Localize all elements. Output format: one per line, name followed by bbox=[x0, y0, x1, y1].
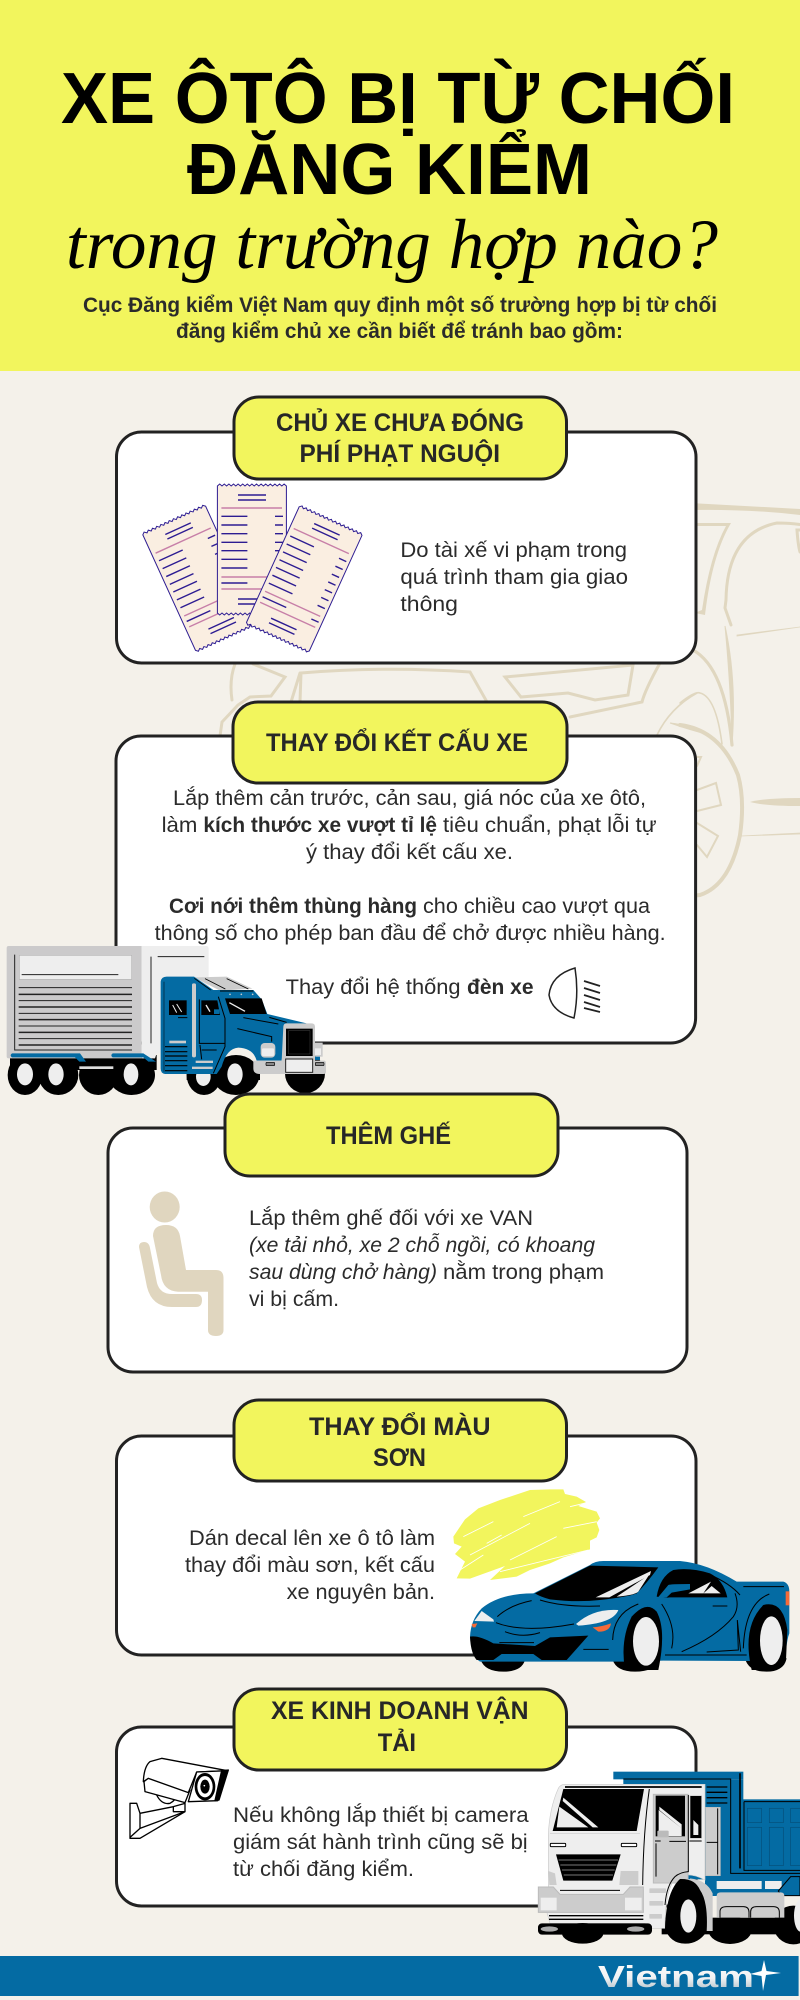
icon: headlight bbox=[549, 968, 600, 1018]
heading tab 3 bbox=[225, 1094, 558, 1176]
heading tab 5: XE KINH DOANH VẬN bbox=[271, 1695, 529, 1725]
text block 4: xe nguyên bản. bbox=[287, 1581, 435, 1604]
front wheel bbox=[690, 1878, 713, 1931]
box bbox=[7, 946, 142, 1058]
text block 5: giám sát hành trình cũng sẽ bị bbox=[233, 1831, 528, 1854]
text block 3 bbox=[249, 1207, 604, 1311]
text block 2 bbox=[155, 787, 666, 999]
icon: seated person bbox=[139, 1192, 224, 1336]
text block 4 bbox=[185, 1527, 435, 1604]
heading tab 1: PHÍ PHẠT NGUỘI bbox=[300, 438, 500, 468]
wheels bbox=[8, 1055, 42, 1095]
text block 1 bbox=[400, 539, 628, 616]
text block 5 bbox=[233, 1804, 529, 1881]
title line 1: XE ÔTÔ BỊ TỪ CHỐI bbox=[61, 57, 735, 139]
text block 2: cho chiều cao vượt qua bbox=[423, 895, 650, 918]
text block 3: vi bị cấm. bbox=[249, 1288, 339, 1311]
heading tab 1 bbox=[234, 397, 566, 479]
illustration: blue sports car bbox=[470, 1561, 789, 1672]
subtitle: đăng kiểm chủ xe cần biết để tránh bao gồm: bbox=[176, 319, 623, 343]
wheels and tyres bbox=[481, 1660, 525, 1672]
heading tab 5 bbox=[234, 1689, 566, 1770]
title line 2: ĐĂNG KIỂM bbox=[187, 129, 592, 210]
wheel arches bbox=[623, 1607, 662, 1670]
windshield bbox=[535, 1566, 658, 1601]
door bbox=[653, 1794, 688, 1883]
cab bbox=[538, 1784, 705, 1928]
panel: chủ xe chưa đóng phí phạt nguội bbox=[116, 397, 696, 663]
text block 5: từ chối đăng kiểm. bbox=[233, 1858, 414, 1881]
subtitle: Cục Đăng kiểm Việt Nam quy định một số trường hợp bị từ chối bbox=[83, 293, 717, 317]
body bbox=[470, 1561, 789, 1662]
text block 2: thông số cho phép ban đầu để chở được nhiều hàng. bbox=[155, 922, 666, 945]
logo bbox=[598, 1959, 781, 1994]
running gear bbox=[662, 1918, 800, 1934]
text block 4: thay đổi màu sơn, kết cấu bbox=[185, 1554, 435, 1577]
text block 1: quá trình tham gia giao bbox=[400, 566, 628, 589]
text block 2: ý thay đổi kết cấu xe. bbox=[306, 841, 513, 864]
illustration: blue container truck bbox=[7, 946, 326, 1095]
text block 5: Nếu không lắp thiết bị camera bbox=[233, 1804, 529, 1827]
icon: receipts bbox=[142, 484, 363, 653]
heading tab 4: THAY ĐỔI MÀU bbox=[309, 1411, 491, 1441]
text block 2: Thay đổi hệ thống bbox=[286, 976, 461, 999]
heading tab 5: TẢI bbox=[378, 1727, 416, 1757]
text block 2: làm bbox=[162, 814, 197, 837]
text block 1: thông bbox=[400, 593, 458, 616]
panel: thêm ghế bbox=[108, 1094, 687, 1372]
text block 2: kích thước xe vượt tỉ lệ bbox=[203, 814, 437, 837]
heading tab 2: THAY ĐỔI KẾT CẤU XE bbox=[266, 727, 528, 757]
side window bbox=[657, 1569, 727, 1598]
lights bbox=[576, 1610, 618, 1626]
panel: xe kinh doanh vận tải bbox=[116, 1689, 696, 1906]
illustration: dump truck bbox=[538, 1772, 800, 1944]
text block 1: Do tài xế vi phạm trong bbox=[400, 539, 627, 562]
heading tab 1: CHỦ XE CHƯA ĐÓNG bbox=[276, 407, 524, 437]
text block 3: nằm trong phạm bbox=[443, 1261, 604, 1284]
cargo bed bbox=[613, 1772, 743, 1779]
panel: thay đổi kết cấu xe bbox=[116, 702, 696, 1043]
heading tab 3: THÊM GHẾ bbox=[326, 1120, 451, 1150]
heading tab 4: SƠN bbox=[373, 1444, 426, 1472]
text block 3: (xe tải nhỏ, xe 2 chỗ ngồi, có khoang bbox=[249, 1234, 595, 1257]
header band bbox=[0, 0, 800, 371]
heading tab 4 bbox=[234, 1400, 566, 1481]
background car outline bbox=[220, 503, 800, 896]
icon: security camera bbox=[130, 1758, 228, 1838]
text block 3: Lắp thêm ghế đối với xe VAN bbox=[249, 1207, 533, 1230]
text block 2: Lắp thêm cản trước, cản sau, giá nóc của xe ôtô, bbox=[173, 787, 646, 810]
logo: Vietnam bbox=[598, 1959, 754, 1994]
panel: thay đổi màu sơn bbox=[116, 1400, 696, 1655]
grille, bumper, lamps bbox=[253, 1023, 326, 1074]
text block 2: tiêu chuẩn, phạt lỗi tự bbox=[443, 814, 657, 837]
footer bar bbox=[0, 1956, 799, 1996]
heading tab 2 bbox=[233, 702, 567, 783]
cab bbox=[194, 977, 252, 991]
text block 3: sau dùng chở hàng) bbox=[249, 1261, 437, 1284]
title line 3 italic: trong trường hợp nào? bbox=[66, 206, 718, 284]
text block 4: Dán decal lên xe ô tô làm bbox=[189, 1527, 435, 1550]
subtitle bbox=[83, 293, 717, 343]
text block 2: đèn xe bbox=[467, 976, 534, 999]
front grille bbox=[470, 1636, 588, 1660]
icon: yellow paint brush stroke bbox=[453, 1489, 600, 1580]
bumper bbox=[538, 1887, 643, 1912]
body lines bbox=[496, 1574, 784, 1655]
text block 2: Cơi nới thêm thùng hàng bbox=[169, 895, 417, 918]
